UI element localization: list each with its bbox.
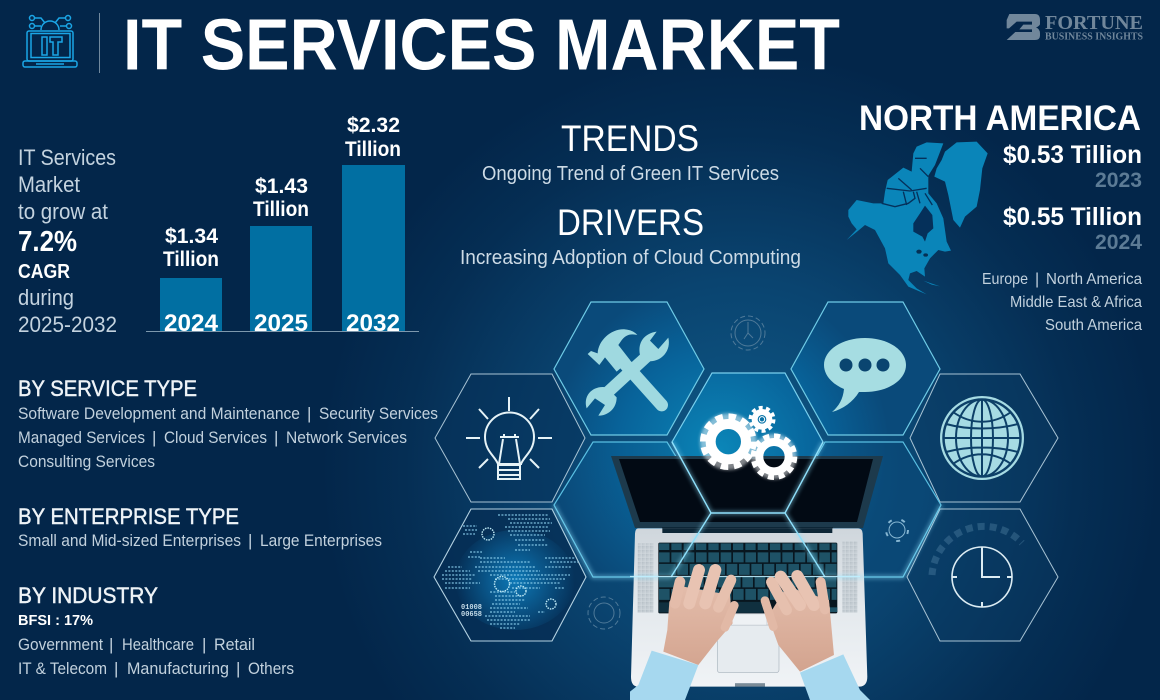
2024 value	[1003, 203, 1142, 254]
logo: Fortune Business Insights: BUSINESS INSIGHTS	[1045, 32, 1143, 42]
segmentation: by industry: Manufacturing	[127, 659, 229, 678]
segmentation: by industry: |	[109, 635, 113, 654]
bar labels: 2032	[346, 310, 400, 337]
icon: data map: 00658	[461, 611, 482, 619]
bar labels: 2025	[254, 310, 308, 337]
icon: data map	[442, 515, 578, 630]
faint gear: right	[886, 519, 908, 541]
laptop screen	[611, 456, 883, 533]
region list: |	[1035, 271, 1039, 288]
hexagon: clock	[907, 509, 1058, 641]
segmentation: by enterprise type: Small and Mid-sized Enterprises	[18, 531, 241, 550]
region list: Europe	[982, 271, 1028, 288]
CAGR statement: 2025-2032	[18, 312, 117, 337]
bar labels: Tillion	[345, 138, 401, 161]
icon: data map: 01008	[461, 604, 482, 612]
regional panel	[847, 99, 1142, 334]
segmentation: by industry: |	[236, 659, 240, 678]
segmentation: by industry: Healthcare	[122, 635, 194, 654]
segmentation: by service type: |	[274, 428, 278, 447]
bar labels: Tillion	[163, 248, 219, 271]
bar labels: $1.43	[255, 175, 308, 198]
segmentation: by service type: Managed Services	[18, 428, 145, 447]
logo: Fortune Business Insights	[1007, 12, 1143, 42]
bar 2032	[342, 165, 405, 331]
segmentation: by industry: Retail	[214, 635, 255, 654]
large gear	[704, 417, 753, 466]
hexagon: center gears	[672, 373, 823, 513]
header divider	[98, 13, 100, 73]
hexagon grid	[434, 302, 1058, 641]
trends and drivers: TRENDS	[561, 118, 699, 159]
bar labels: Tillion	[253, 198, 309, 221]
segmentation: by industry	[18, 583, 294, 678]
icon: light bulb	[466, 397, 552, 479]
map: North America	[847, 142, 988, 294]
segmentation: by enterprise type: BY ENTERPRISE TYPE	[18, 504, 239, 529]
CAGR statement: to grow at	[18, 199, 108, 224]
hexagon: globe	[910, 374, 1058, 502]
segmentation: by industry: Others	[248, 659, 294, 678]
CAGR statement: CAGR	[18, 261, 70, 283]
logo: Fortune Business Insights: FORTUNE	[1045, 12, 1143, 34]
keyboard rows	[659, 547, 837, 610]
segmentation: by enterprise type: Large Enterprises	[260, 531, 382, 550]
2024 value: 2024	[1095, 231, 1142, 254]
bar labels	[163, 114, 401, 337]
segmentation: by industry: |	[114, 659, 118, 678]
left sleeve	[630, 651, 698, 700]
hands on keyboard	[630, 570, 870, 700]
segmentation: by industry: |	[202, 635, 206, 654]
bar 2025	[250, 226, 312, 331]
hexagon: light bulb	[435, 374, 585, 502]
segmentation: by service type: Software Development and Maintenance	[18, 404, 300, 423]
region list: North America	[1046, 271, 1142, 288]
faint gear: lower	[588, 597, 620, 629]
trends and drivers	[460, 118, 801, 269]
laptop base	[631, 528, 867, 687]
icon: clock	[932, 526, 1022, 607]
region list: Middle East & Africa	[1010, 294, 1142, 311]
small gear	[750, 408, 774, 431]
icon: hammer and wrench	[586, 329, 669, 416]
CAGR statement: Market	[18, 172, 80, 197]
CAGR statement: IT Services	[18, 145, 116, 170]
segmentation: by industry: BY INDUSTRY	[18, 583, 158, 608]
trends and drivers: Increasing Adoption of Cloud Computing	[460, 247, 801, 269]
segmentation: by service type	[18, 376, 438, 471]
bar labels: $1.34	[165, 225, 218, 248]
medium gear	[754, 436, 794, 477]
CAGR statement	[18, 145, 117, 337]
bar 2024	[160, 278, 222, 331]
hexagon: lower right glass	[785, 442, 941, 577]
glowing hexagon highlights	[554, 442, 941, 577]
bar chart: market size	[146, 114, 419, 337]
2023 value: $0.53 Tillion	[1003, 141, 1142, 169]
region list	[982, 271, 1142, 334]
laptop	[611, 456, 883, 687]
right sleeve	[800, 654, 870, 700]
gears icon	[704, 408, 794, 477]
icon: globe	[940, 396, 1024, 480]
header icon: laptop with IT	[23, 16, 77, 67]
region heading: NORTH AMERICA	[859, 99, 1141, 138]
segmentation: by service type: Cloud Services	[164, 428, 267, 447]
segmentation: by industry: Government	[18, 635, 103, 654]
region list: South America	[1045, 317, 1142, 334]
hexagon: speech	[791, 302, 940, 435]
bar labels: $2.32	[347, 114, 400, 137]
2023 value	[1003, 141, 1142, 192]
segmentation: by service type: Security Services	[319, 404, 438, 423]
icon: speech bubble	[824, 338, 906, 412]
CAGR statement: 7.2%	[18, 226, 77, 258]
segmentation: by service type: BY SERVICE TYPE	[18, 376, 197, 401]
segmentation: by industry: BFSI : 17%	[18, 612, 93, 629]
hexagon: lower left glass	[554, 442, 711, 577]
segmentation: by service type: Consulting Services	[18, 452, 155, 471]
trends and drivers: Ongoing Trend of Green IT Services	[482, 163, 779, 185]
segmentation: by enterprise type: |	[248, 531, 252, 550]
hexagon: data map	[434, 509, 586, 641]
segmentation: by service type: |	[152, 428, 156, 447]
segmentation: by service type: Network Services	[286, 428, 407, 447]
2023 value: 2023	[1095, 169, 1142, 192]
faint gear: top	[731, 316, 765, 350]
title: IT SERVICES MARKET	[123, 6, 840, 86]
hexagon: tools	[554, 302, 704, 435]
bar labels: 2024	[164, 310, 219, 337]
segmentation: by industry: IT & Telecom	[18, 659, 107, 678]
CAGR statement: during	[18, 285, 74, 310]
trends and drivers: DRIVERS	[557, 202, 704, 243]
right hand	[765, 576, 834, 672]
gear glow	[705, 418, 792, 475]
left hand	[663, 570, 734, 665]
2024 value: $0.55 Tillion	[1003, 203, 1142, 231]
segmentation: by service type: |	[307, 404, 311, 423]
segmentation: by enterprise type	[18, 504, 382, 550]
